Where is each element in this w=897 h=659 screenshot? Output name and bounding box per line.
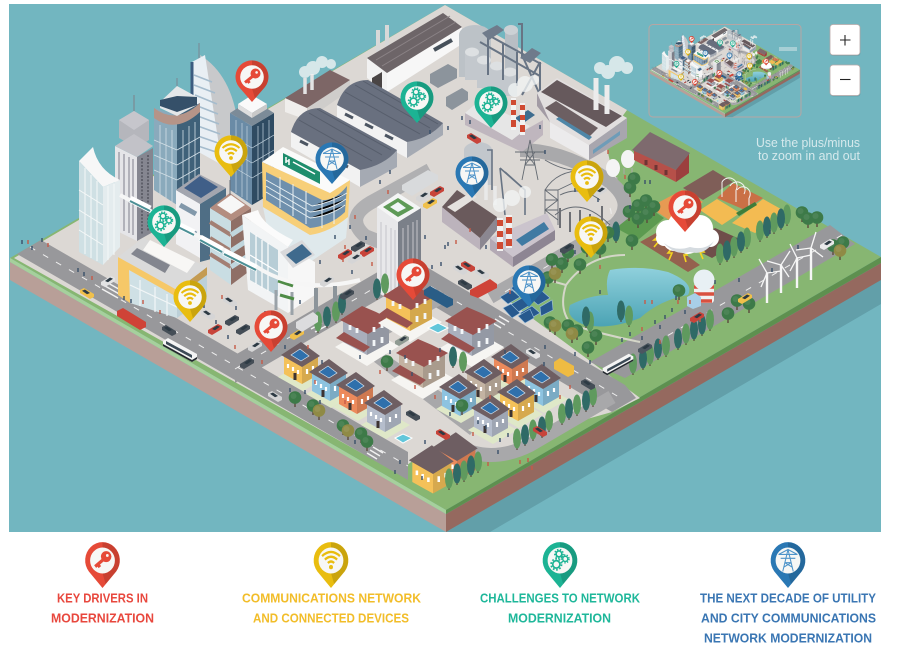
minimap panel — [649, 24, 801, 117]
white curved glass tower — [79, 147, 120, 265]
pin: challenges — [148, 205, 180, 247]
legend item: challenges: MODERNIZATION — [508, 612, 611, 626]
right factory — [537, 78, 627, 160]
concrete district ground — [14, 5, 640, 473]
crosswalks — [102, 283, 509, 459]
legend item: next decade: THE NEXT DECADE OF UTILITY — [700, 592, 877, 606]
warehouse access road — [356, 170, 430, 242]
legend item: communications network — [242, 542, 421, 626]
curved striped tower — [192, 43, 238, 175]
pin: communications at park — [574, 216, 608, 258]
legend item: communications network: COMMUNICATIONS NETWORK — [242, 592, 421, 606]
slab right side — [446, 263, 881, 532]
power lines and pylons — [515, 140, 610, 225]
legend item: communications network: AND CONNECTED DEVICES — [253, 612, 409, 626]
vehicles — [80, 133, 834, 440]
pin: next decade at hospital — [316, 142, 348, 184]
zoom out button — [830, 65, 860, 96]
pin: challenges at factory — [474, 86, 508, 128]
olive trees — [313, 244, 846, 440]
slab shadow on water — [446, 279, 881, 532]
industrial zone — [285, 13, 635, 305]
pin: communications near shop — [174, 280, 206, 322]
legend item: next decade: NETWORK MODERNIZATION — [704, 632, 872, 646]
park paths — [548, 255, 640, 342]
front arched warehouse — [291, 108, 397, 187]
residential houses — [278, 282, 568, 494]
residential street — [352, 338, 482, 435]
brown and blue glass tower — [154, 78, 200, 205]
lower factory — [442, 180, 497, 250]
residential south loop — [455, 397, 612, 455]
legend item: key drivers: KEY DRIVERS IN — [57, 592, 148, 606]
zoom in button — [830, 24, 860, 56]
center chimney factory — [465, 98, 543, 152]
legend item: challenges — [480, 542, 640, 626]
top factory — [367, 13, 462, 92]
pin: key drivers — [236, 60, 268, 102]
trees — [289, 172, 849, 490]
minimap city thumbnail — [650, 26, 800, 117]
diagonal road by the solar field — [410, 266, 636, 412]
pond — [569, 268, 689, 326]
storage tanks — [606, 150, 635, 183]
water tower — [687, 270, 714, 309]
zoom hint text: Use the plus/minus — [756, 136, 860, 150]
farm barn — [632, 132, 690, 182]
dark conical trees — [323, 208, 785, 485]
pin: key drivers at house — [396, 258, 430, 300]
wind turbines — [759, 232, 823, 303]
legend — [51, 542, 877, 646]
lower steel frame and silo — [464, 142, 525, 215]
legend item: key drivers — [51, 542, 154, 626]
pin: key drivers at junction — [254, 310, 288, 352]
grass ground — [10, 5, 881, 514]
smoke plumes — [299, 56, 633, 212]
storm cloud — [654, 211, 719, 262]
mid rise with roof solar — [176, 174, 226, 262]
blue tower with white roof — [230, 95, 274, 205]
silos and pipes — [459, 24, 541, 96]
map location pins — [148, 60, 702, 352]
central white tower — [377, 193, 421, 305]
road between city and houses — [235, 262, 395, 383]
legend item: challenges: CHALLENGES TO NETWORK — [480, 592, 640, 606]
elevated monorail — [120, 195, 360, 315]
zoom hint text — [756, 136, 861, 163]
northeast countryside road — [590, 225, 855, 378]
southwest main road — [17, 240, 408, 480]
pin: next decade at plant — [456, 156, 488, 198]
hospital building — [262, 147, 350, 262]
delivery trucks — [402, 64, 468, 196]
white retail building — [242, 210, 315, 315]
farm fields — [640, 170, 788, 272]
pin: challenges at warehouse — [400, 81, 434, 123]
residential cross street — [340, 290, 450, 355]
legend item: next decade — [700, 542, 877, 646]
zoom hint text: to zoom in and out — [758, 149, 861, 163]
orchard patch — [616, 205, 664, 240]
legend item: key drivers: MODERNIZATION — [51, 612, 154, 626]
yellow corner shop — [118, 238, 207, 318]
road markings — [30, 208, 842, 466]
grey spire tower — [115, 95, 153, 241]
solar farm — [500, 281, 553, 323]
slab left side — [10, 262, 446, 532]
pin: communications — [214, 135, 248, 177]
map panel background — [9, 4, 881, 532]
road network — [17, 150, 855, 480]
pin: communications at grid — [570, 160, 604, 202]
small brown roof factory — [285, 70, 350, 120]
legend item: next decade: AND CITY COMMUNICATIONS — [701, 612, 876, 626]
pedestrians — [22, 116, 798, 480]
round trees — [289, 172, 849, 451]
pin: next decade at solar farm — [512, 265, 546, 307]
power plant block — [490, 213, 555, 267]
minimap viewport marker — [779, 47, 797, 51]
pin: key drivers at farm — [668, 190, 702, 232]
power station loop road — [490, 150, 625, 297]
conical trees — [314, 204, 791, 490]
buses and trucks — [163, 338, 197, 362]
skyscraper district — [79, 43, 360, 318]
swimming pools — [395, 323, 448, 443]
isometric city map — [10, 5, 881, 532]
brown striped tower — [210, 180, 251, 285]
rear arched warehouse — [337, 80, 443, 158]
